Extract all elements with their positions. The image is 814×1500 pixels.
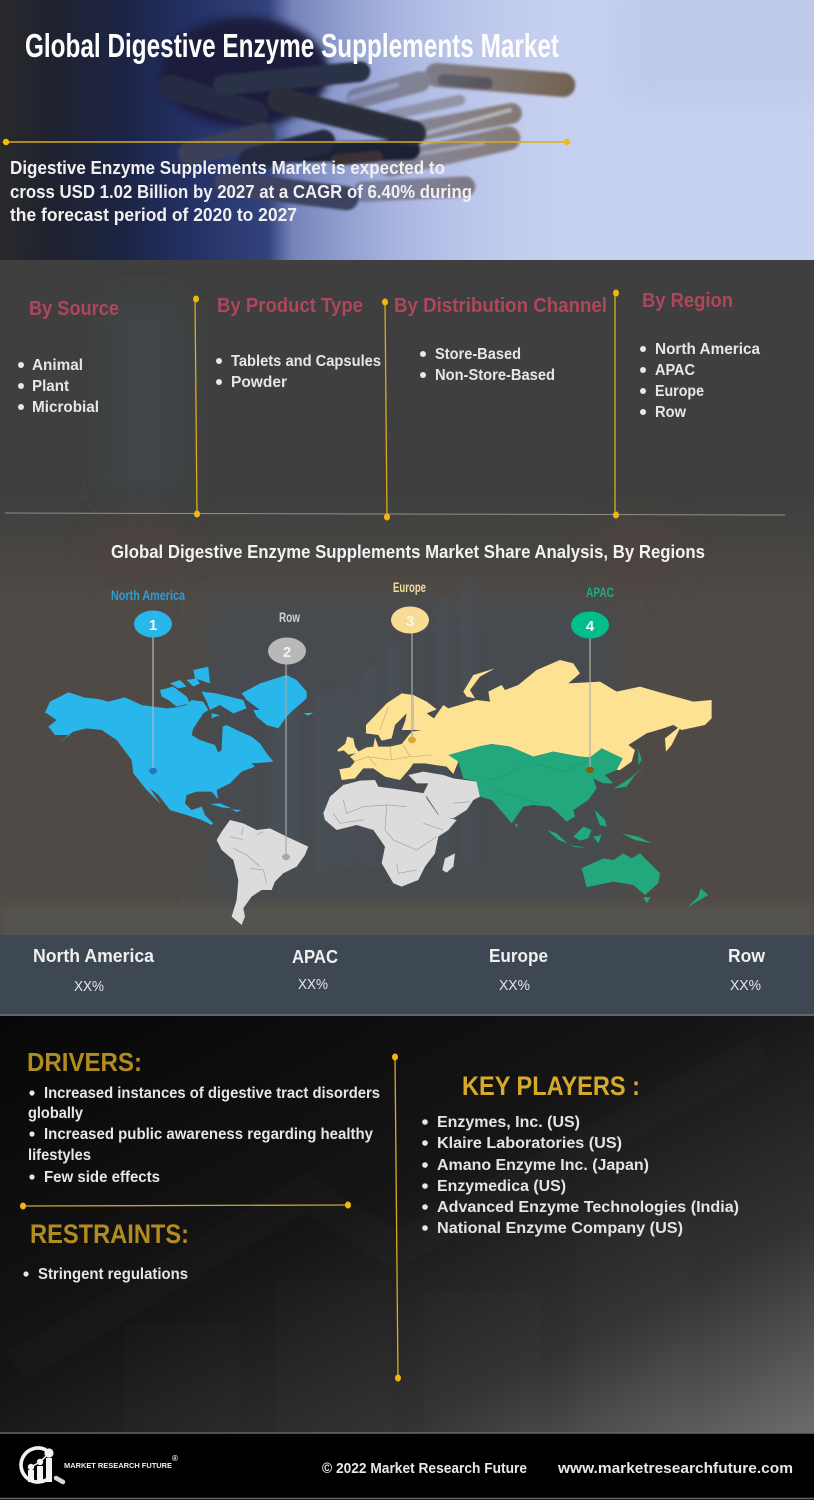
world map [45, 579, 712, 925]
segment: by source: Animal [32, 357, 83, 374]
pin: North America: North America [111, 587, 185, 603]
panel: regional share table: Europe [489, 946, 548, 966]
pin: Europe [391, 579, 429, 743]
segment: by distribution channel [394, 295, 607, 384]
panel: regional share table: Row [728, 946, 766, 966]
map heading: Global Digestive Enzyme Supplements Market Share Analysis, By Regions [111, 542, 705, 562]
key players list: Amano Enzyme Inc. (Japan) [437, 1157, 649, 1174]
pin: Europe: Europe [393, 579, 426, 595]
key players list: Enzymes, Inc. (US) [437, 1114, 580, 1131]
drivers list: lifestyles [28, 1147, 91, 1164]
intro text [10, 158, 472, 225]
panel: regional share table: North America [33, 946, 155, 966]
segment: by source: Microbial [32, 399, 99, 416]
divider with gold dots [3, 139, 570, 145]
segment: by product type [216, 295, 381, 391]
region: APAC [448, 744, 708, 908]
drivers list: globally [28, 1105, 83, 1122]
divider: drivers and restraints [20, 1202, 351, 1210]
restraints list: Stringent regulations [38, 1266, 188, 1283]
panel: header hero [0, 0, 814, 260]
panel: regional share table: XX% [730, 977, 761, 994]
key players list [422, 1114, 739, 1237]
segment: by distribution channel: Non-Store-Based [435, 367, 555, 384]
icon: logo [21, 1448, 63, 1482]
key players list: Enzymedica (US) [437, 1178, 566, 1195]
key players list: National Enzyme Company (US) [437, 1220, 683, 1237]
pin: Row: 2 [283, 644, 291, 661]
footer copyright: © 2022 Market Research Future [322, 1460, 527, 1477]
intro text: Digestive Enzyme Supplements Market is expected to [10, 158, 445, 178]
region: North America [45, 667, 313, 825]
segment: by product type: Powder [231, 374, 287, 391]
segment dividers [5, 290, 785, 520]
restraints heading: RESTRAINTS: [30, 1219, 189, 1249]
logo wordmark: ® [172, 1454, 178, 1463]
drivers list: Few side effects [44, 1169, 160, 1186]
segment: by source: By Source [29, 298, 119, 320]
segment: by distribution channel: By Distribution Channel [394, 295, 607, 317]
panel: regional share table: XX% [74, 978, 104, 995]
panel: segmentation and map background [0, 260, 814, 945]
segment: by region: By Region [642, 290, 733, 312]
key players list: Klaire Laboratories (US) [437, 1135, 622, 1152]
segment: by source [18, 298, 119, 416]
pin: Row: Row [279, 609, 300, 625]
segment: by product type: Tablets and Capsules [231, 353, 381, 370]
panel: regional share table [0, 935, 814, 1015]
intro text: cross USD 1.02 Billion by 2027 at a CAGR of 6.40% during [10, 182, 472, 202]
key players heading: KEY PLAYERS : [462, 1071, 640, 1101]
drivers list: Increased public awareness regarding healthy [44, 1126, 373, 1143]
panel: regional share table: XX% [298, 976, 328, 993]
drivers list: Increased instances of digestive tract disorders [44, 1085, 380, 1102]
segment: by region: Row [655, 404, 687, 421]
segment: by region: Europe [655, 383, 704, 400]
segment: by product type: By Product Type [217, 295, 363, 317]
title: Global Digestive Enzyme Supplements Market [25, 27, 559, 64]
segment: by region [640, 290, 760, 421]
footer bar [0, 1433, 814, 1500]
pin: APAC: 4 [586, 618, 595, 635]
capsules photo, dark side [170, 72, 413, 198]
pin: North America: 1 [149, 617, 157, 634]
segment: by source: Plant [32, 378, 70, 395]
pin: APAC: APAC [586, 584, 614, 600]
panel: regional share table: APAC [292, 947, 338, 967]
drivers list [28, 1085, 380, 1186]
region: Europe and Russia [337, 660, 712, 780]
logo wordmark: MARKET RESEARCH FUTURE [64, 1461, 172, 1470]
region: Row [217, 772, 480, 925]
panel: regional share table: XX% [499, 977, 530, 994]
drivers heading: DRIVERS: [27, 1047, 142, 1077]
segment: by region: APAC [655, 362, 695, 379]
pin: APAC [571, 584, 614, 773]
pin: Europe: 3 [406, 613, 414, 630]
key players list: Advanced Enzyme Technologies (India) [437, 1199, 739, 1216]
pin: North America [111, 587, 185, 774]
segment: by distribution channel: Store-Based [435, 346, 521, 363]
footer website: www.marketresearchfuture.com [557, 1460, 793, 1477]
intro text: the forecast period of 2020 to 2027 [10, 205, 297, 225]
logo wordmark [64, 1454, 178, 1470]
panel: drivers, restraints and key players background [0, 1016, 814, 1433]
vertical divider [392, 1054, 401, 1382]
segment: by region: North America [655, 341, 760, 358]
capsules photo, light side [350, 75, 563, 192]
pin: Row [268, 609, 306, 860]
